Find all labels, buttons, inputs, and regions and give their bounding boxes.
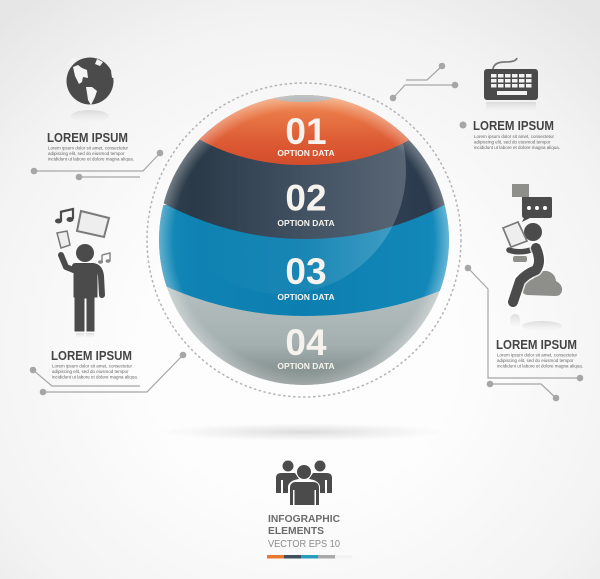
body text: incididunt ut labore et dolore magna aliqua. (52, 374, 138, 380)
block: person on cloud right (465, 184, 583, 401)
label 01: OPTION DATA (277, 148, 335, 158)
icon: cloud (522, 271, 562, 296)
connector lines (390, 63, 458, 101)
body text (52, 364, 138, 380)
label 03: 03 (285, 251, 327, 292)
band 04 grey (155, 270, 455, 390)
ground shadow (159, 423, 449, 441)
band 03 blue (150, 205, 460, 316)
icon: person (61, 244, 102, 338)
icon: phone (57, 231, 70, 248)
label 02: 02 (285, 178, 327, 218)
icon: keyboard (484, 58, 538, 111)
glass highlight (270, 144, 406, 294)
block: globe top left (31, 57, 163, 180)
sphere labels (277, 111, 335, 371)
connector lines (465, 265, 583, 401)
heading: LOREM IPSUM (496, 338, 577, 352)
body text: adipiscing elit, sed do eiusmod tempor (52, 369, 129, 374)
body text: incididunt ut labore et dolore magna aliqua. (48, 156, 134, 162)
title (268, 514, 340, 537)
body text: adipiscing elit, sed do eiusmod tempor (474, 140, 551, 144)
icon: tablet (503, 222, 527, 247)
icon: tablet (77, 211, 109, 237)
colour legend bar (267, 555, 352, 558)
bullet (460, 122, 466, 128)
body text: adipiscing elit, sed do eiusmod tempor (48, 151, 125, 156)
heading: LOREM IPSUM (47, 131, 128, 145)
block: person with devices left (30, 209, 186, 395)
icon: sitting person (509, 223, 542, 302)
body text (48, 146, 134, 162)
label 04: OPTION DATA (277, 361, 335, 371)
body text: Lorem ipsum dolor sit amet, consectetur (497, 352, 578, 358)
edge shading (159, 95, 449, 385)
icon: music notes (55, 209, 110, 264)
label 04: 04 (285, 322, 327, 363)
icon: people (276, 460, 332, 505)
subtitle: VECTOR EPS 10 (268, 539, 340, 550)
body text: Lorem ipsum dolor sit amet, consectetur (48, 146, 129, 150)
icon: globe (66, 57, 117, 122)
heading: LOREM IPSUM (473, 119, 554, 133)
body text: incididunt ut labore et dolore magna aliqua. (474, 145, 560, 150)
block: keyboard top right (390, 58, 560, 150)
body text: adipiscing elit, sed do eiusmod tempor (497, 358, 574, 363)
label 02 (277, 178, 335, 228)
body text: Lorem ipsum dolor sit amet, consectetur (52, 364, 133, 368)
reflection (510, 314, 562, 331)
body text (474, 134, 560, 150)
sphere (159, 95, 449, 385)
label 01: 01 (285, 111, 327, 152)
top cap (274, 95, 332, 102)
band 01 red (200, 95, 410, 165)
label 03 (277, 251, 335, 302)
label 04 (277, 322, 335, 371)
body text (497, 352, 583, 368)
heading: LOREM IPSUM (51, 349, 132, 363)
block: infographic elements footer (267, 460, 352, 558)
dashed ring (147, 83, 461, 397)
title: INFOGRAPHIC (268, 514, 340, 525)
band 02 dark (150, 130, 460, 239)
connector lines (30, 352, 186, 395)
label 03: OPTION DATA (277, 292, 335, 302)
title: ELEMENTS (268, 526, 324, 537)
label 02: OPTION DATA (277, 218, 335, 228)
connector lines (31, 150, 163, 180)
body text: Lorem ipsum dolor sit amet, consectetur (474, 134, 555, 139)
body text: incididunt ut labore et dolore magna aliqua. (497, 364, 583, 368)
label 01 (277, 111, 335, 158)
icon: speech bubbles (512, 184, 552, 222)
